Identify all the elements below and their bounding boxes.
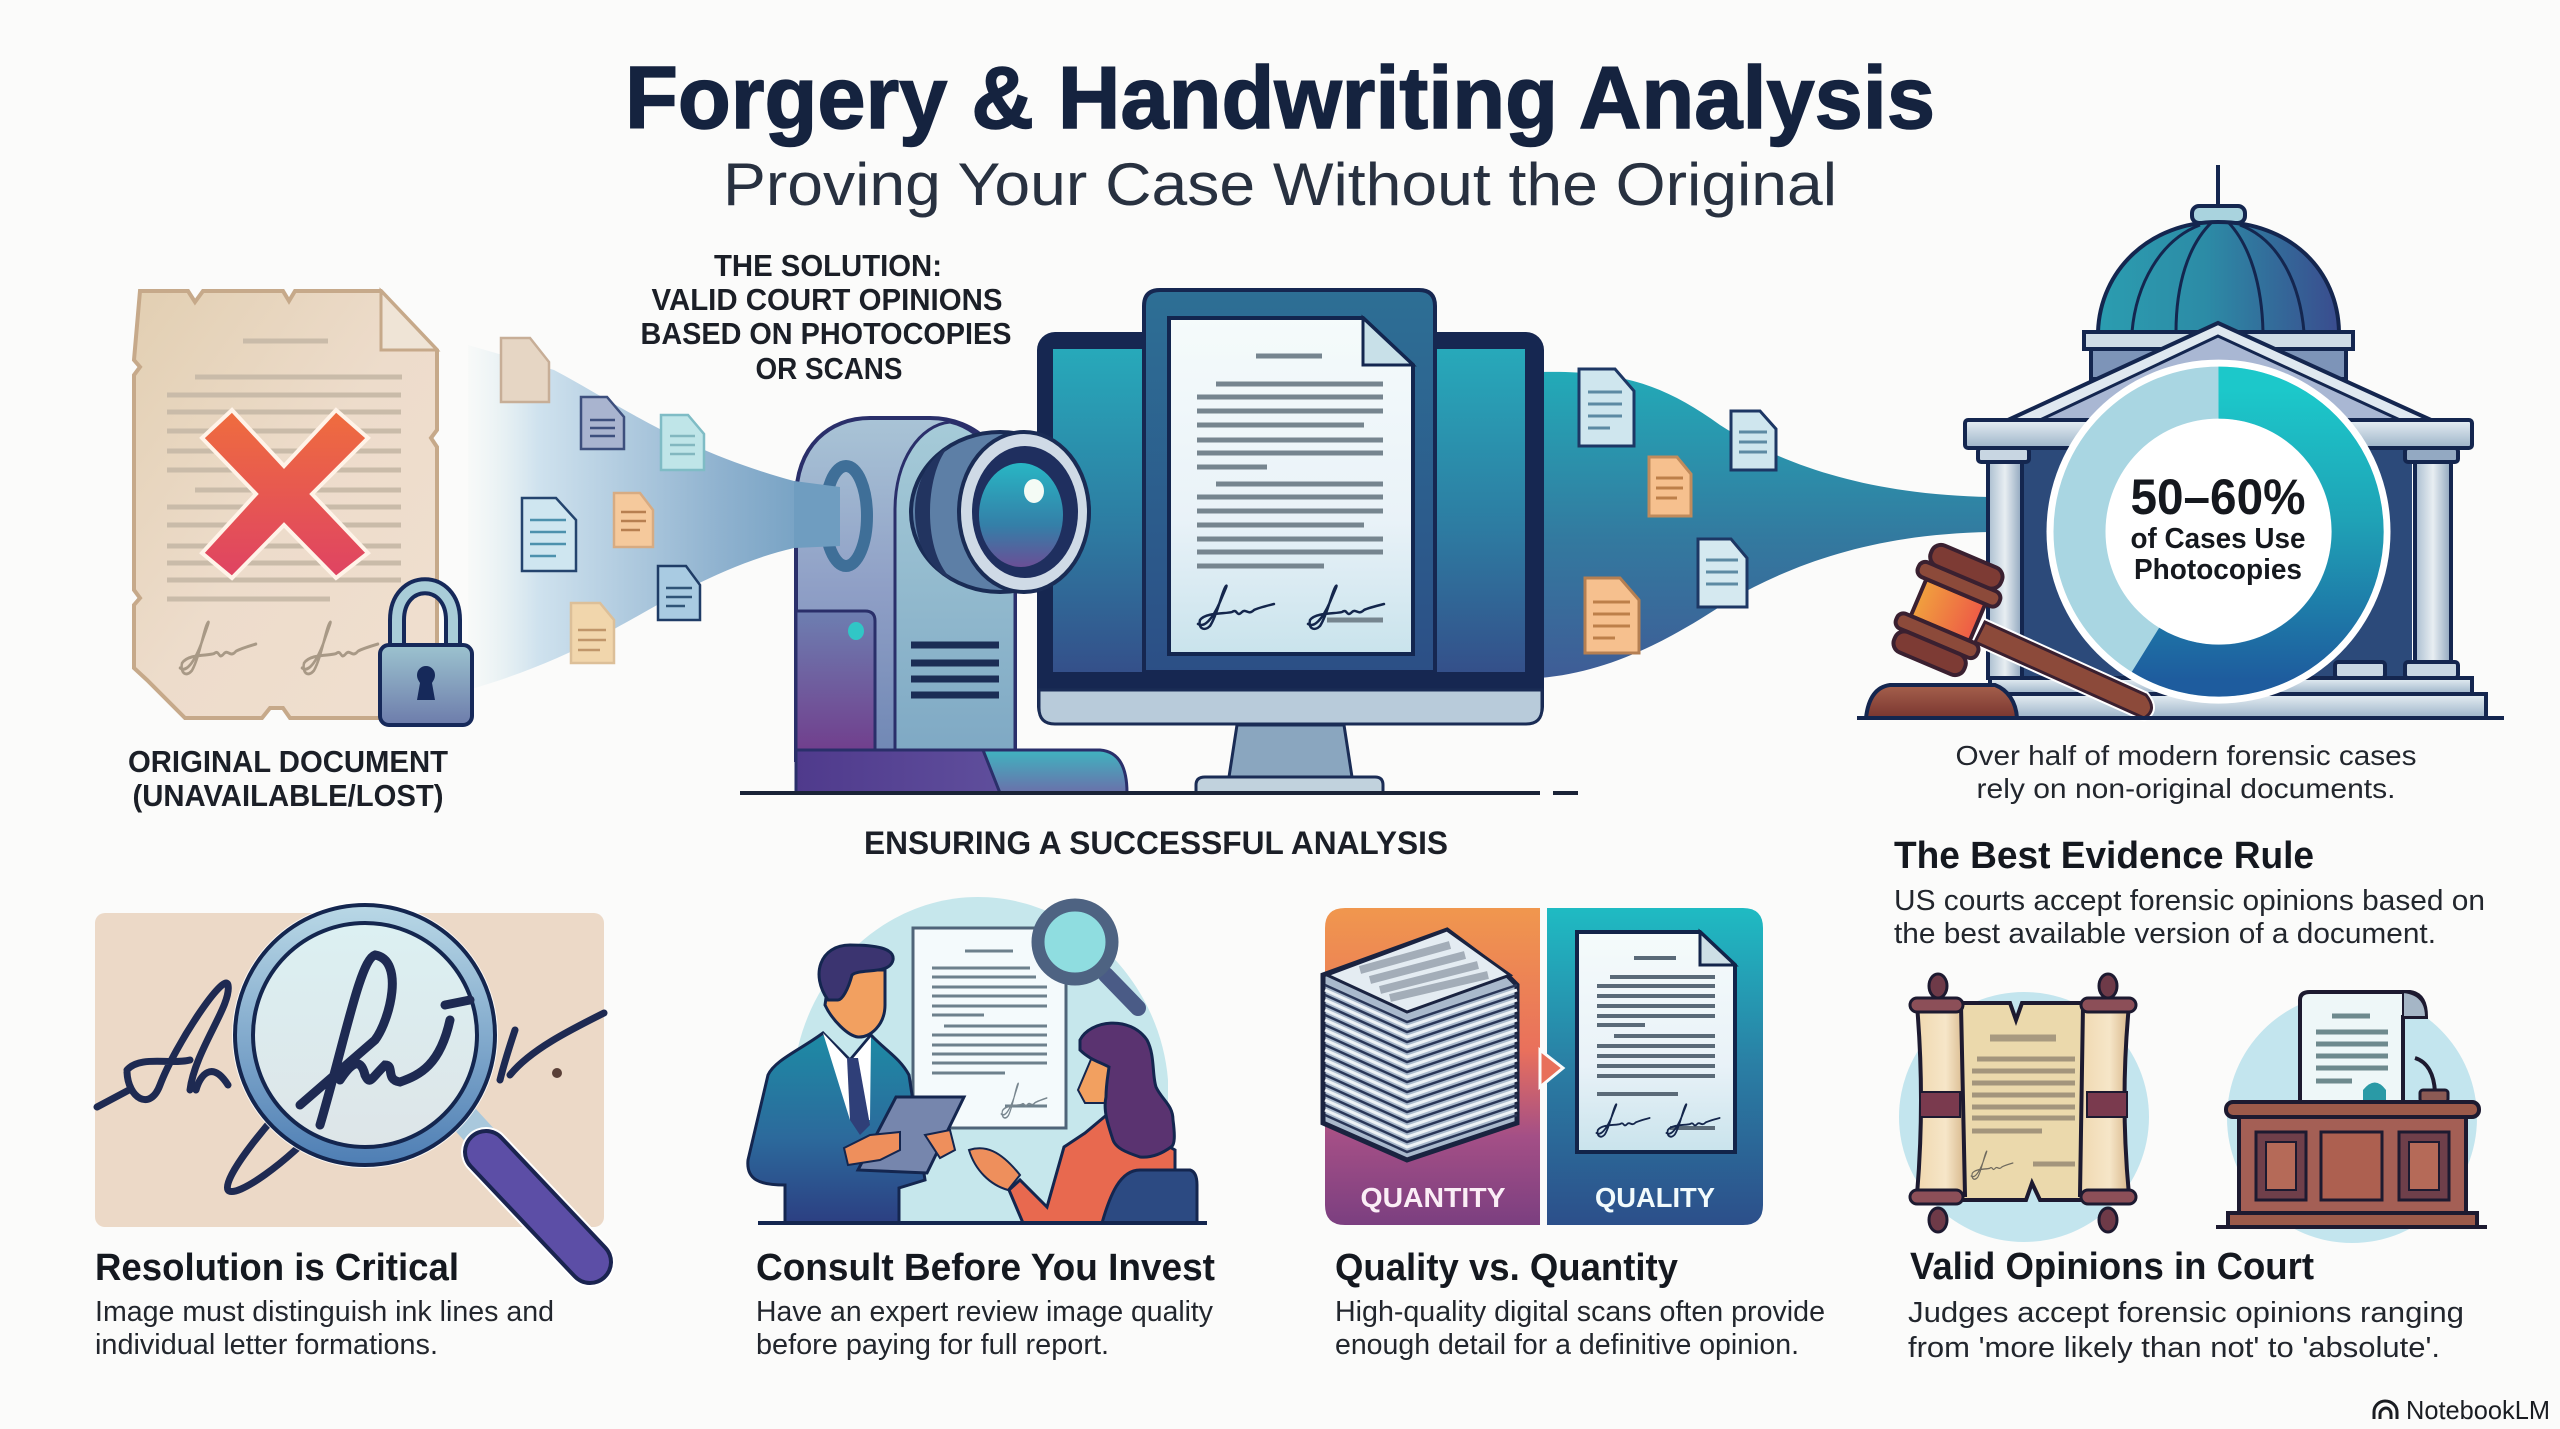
panel: valid opinions in court: from 'more likely than not' to 'absolute'. [1908, 1332, 2440, 1364]
label: original document: ORIGINAL DOCUMENT [128, 744, 448, 779]
panel: resolution is critical: individual letter formations. [95, 1329, 438, 1361]
caption: over half: rely on non-original documents. [1976, 773, 2396, 804]
heading: Resolution is Critical [95, 1247, 459, 1289]
icons: small documents right [1579, 369, 1776, 653]
panel: best evidence rule: The Best Evidence Rule [1894, 835, 2314, 877]
heading: Quality vs. Quantity [1335, 1247, 1678, 1289]
arrow [1540, 1050, 1563, 1087]
callout: the solution: BASED ON PHOTOCOPIES [640, 316, 1012, 351]
caption: over half [1956, 740, 2416, 804]
panel: best evidence rule [1894, 835, 2485, 950]
stand [1229, 725, 1352, 777]
panel: consult before you invest: before paying for full report. [756, 1329, 1109, 1361]
chair [1102, 1170, 1197, 1223]
heading: ensuring a successful analysis: ENSURING A SUCCESSFUL ANALYSIS [864, 825, 1448, 861]
camera / scanner [794, 418, 1127, 793]
reviewed document [913, 928, 1066, 1128]
callout: the solution [640, 248, 1012, 386]
donut value: 50–60% [2130, 469, 2306, 525]
donut chart: 50-60% of cases use photocopies [2046, 360, 2390, 704]
heading: Valid Opinions in Court [1910, 1246, 2314, 1288]
monitor [1037, 290, 1544, 793]
tablet and document [1144, 290, 1435, 672]
illustration: signature card [95, 913, 604, 1227]
heading: Consult Before You Invest [756, 1247, 1215, 1289]
callout: the solution: VALID COURT OPINIONS [652, 282, 1002, 317]
ground line [740, 791, 1578, 795]
donut caption: of Cases Use [2130, 523, 2306, 555]
icon: padlock [380, 586, 472, 725]
icon: magnifying glass [232, 902, 590, 1262]
title: Forgery & Handwriting Analysis [625, 48, 1935, 147]
label: original document: (UNAVAILABLE/LOST) [132, 778, 444, 813]
icons: small documents left [501, 338, 704, 663]
lens [911, 432, 1089, 592]
spire [2216, 165, 2220, 206]
logo: NotebookLM: NotebookLM [2406, 1395, 2550, 1425]
icon: red X [202, 410, 368, 578]
label: original document [128, 744, 448, 813]
subtitle: Proving Your Case Without the Original [723, 151, 1837, 218]
panel: best evidence rule: the best available version of a document. [1894, 918, 2436, 950]
caption: over half: Over half of modern forensic cases [1956, 740, 2416, 771]
illustration: consultation [748, 897, 1207, 1223]
panel: valid opinions in court [1899, 974, 2487, 1364]
icon: judge's bench [2216, 992, 2487, 1243]
back port [825, 466, 867, 566]
callout: the solution: OR SCANS [756, 351, 902, 386]
description: High-quality digital scans often provide [1335, 1296, 1825, 1328]
right panel: quality: QUALITY [1595, 1182, 1715, 1213]
beam: left, documents to camera [468, 345, 845, 690]
woman [1009, 1113, 1175, 1223]
dark interior [2022, 448, 2412, 678]
beam: right, monitor to courthouse [1540, 372, 1990, 678]
dome [2098, 222, 2339, 332]
panel: best evidence rule: US courts accept forensic opinions based on [1894, 885, 2485, 917]
panel: consult before you invest [748, 897, 1215, 1361]
icon: scroll [1899, 974, 2149, 1242]
description: Image must distinguish ink lines and [95, 1296, 554, 1328]
pediment [2008, 323, 2431, 420]
magnifier [1106, 975, 1138, 1008]
description: Have an expert review image quality [756, 1296, 1213, 1328]
panel: quality vs quantity [1323, 908, 1825, 1361]
left panel: quantity [1323, 908, 1540, 1225]
tablet [858, 1097, 964, 1173]
label: QUANTITY [1360, 1182, 1506, 1213]
right panel: quality [1547, 908, 1763, 1225]
columns [1988, 462, 2022, 678]
signature [97, 954, 604, 1192]
description: Judges accept forensic opinions ranging [1908, 1297, 2464, 1329]
panel: resolution is critical [95, 902, 604, 1361]
donut chart: 50-60% of cases use photocopies: Photocopies [2134, 554, 2302, 586]
panel: quality vs quantity: enough detail for a definitive opinion. [1335, 1329, 1799, 1361]
icon: paper stack [1323, 930, 1517, 1160]
callout: the solution: THE SOLUTION: [714, 248, 942, 283]
icon: original document parchment [134, 291, 437, 718]
courthouse [1965, 165, 2486, 718]
man [748, 1033, 925, 1223]
icon: gavel [1866, 539, 2152, 718]
